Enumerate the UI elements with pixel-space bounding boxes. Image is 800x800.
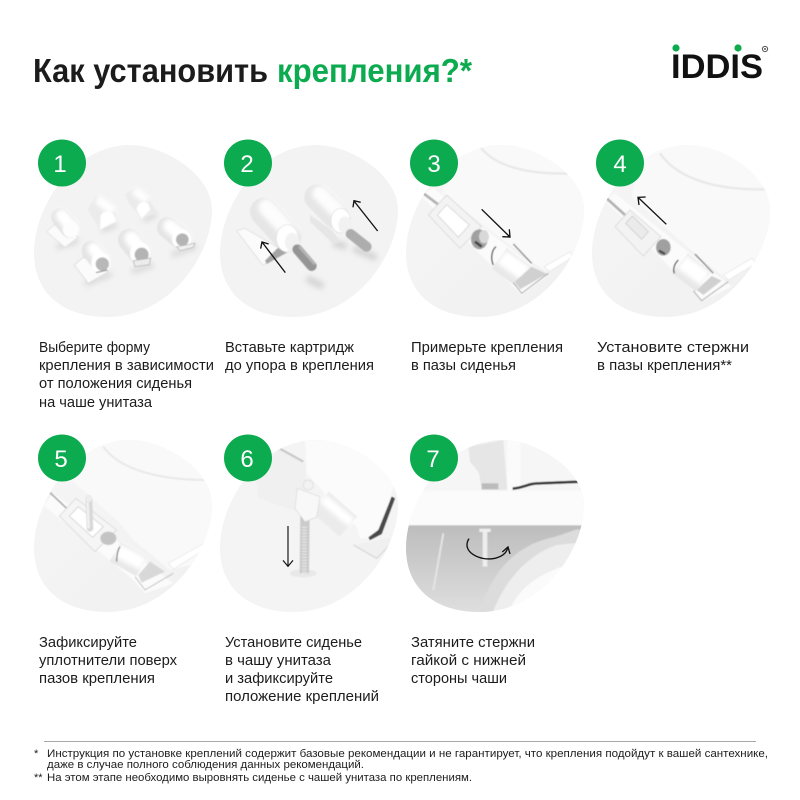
caption 6: и зафиксируйте — [225, 671, 333, 687]
caption 7: стороны чаши — [411, 671, 507, 687]
caption 7: Затяните стержни — [411, 635, 535, 651]
panel: step 2 — [215, 140, 405, 374]
badge 1: 1 — [53, 151, 67, 178]
footnotes: ** — [34, 772, 43, 784]
caption 6: положение креплений — [225, 689, 379, 705]
photo: rods set into bracket slots — [592, 152, 765, 317]
badge 7 — [410, 434, 458, 482]
badge 5 — [38, 434, 86, 482]
arrow — [638, 197, 666, 224]
arrow — [482, 209, 510, 237]
caption 1 — [39, 340, 214, 411]
footnotes: * — [34, 748, 39, 760]
arrows — [261, 201, 378, 273]
footnotes: даже в случае полного соблюдения данных рекомендаций. — [47, 759, 364, 771]
badge 3 — [410, 140, 458, 186]
panel: step 5 — [34, 434, 205, 686]
footnotes: На этом этапе необходимо выровнять сиденье с чашей унитаза по креплениям. — [47, 772, 472, 784]
caption 4 — [597, 340, 749, 374]
photo: six mounting brackets — [34, 145, 212, 317]
footnotes: Инструкция по установке креплений содержит базовые рекомендации и не гарантирует, что крепления подойдут к вашей сантехнике, — [47, 748, 768, 760]
badge 2 — [224, 140, 272, 186]
caption 1: от положения сиденья — [39, 376, 192, 392]
title: Как установить — [33, 52, 268, 89]
badge 2: 2 — [240, 151, 254, 178]
caption 7 — [411, 635, 535, 687]
caption 5: Зафиксируйте — [39, 635, 137, 651]
caption 3: в пазы сиденья — [411, 358, 516, 374]
logo: IDDIS: IDDIS — [671, 48, 763, 86]
panel: step 1 — [30, 140, 220, 411]
title: крепления?* — [277, 52, 472, 89]
panel: step 3 — [406, 140, 573, 373]
caption 3: Примерьте крепления — [411, 340, 563, 356]
caption 3 — [411, 340, 563, 374]
caption 1: крепления в зависимости — [39, 358, 214, 374]
title — [33, 52, 472, 89]
photo: underside of bowl with nut — [406, 440, 582, 612]
badge 4 — [596, 140, 644, 186]
photo: seals fixed over bracket slots — [34, 446, 205, 612]
caption 2: Вставьте картридж — [225, 340, 354, 356]
caption 2: до упора в крепления — [225, 358, 374, 374]
caption 7: гайкой с нижней — [411, 653, 526, 669]
caption 4: в пазы крепления** — [597, 358, 732, 374]
badge 1 — [38, 140, 86, 186]
panel: step 6 — [220, 434, 398, 704]
caption 5: уплотнители поверх — [39, 653, 178, 669]
caption 1: Выберите форму — [39, 340, 151, 356]
panel: step 7 — [406, 434, 582, 686]
caption 6 — [225, 635, 379, 705]
arrow — [283, 526, 293, 566]
caption 5 — [39, 635, 178, 687]
photo: seat placed in bowl — [220, 441, 398, 612]
caption 1: на чаше унитаза — [39, 395, 153, 411]
caption 4: Установите стержни — [597, 340, 749, 356]
badge 4: 4 — [613, 151, 627, 178]
caption 2 — [225, 340, 374, 374]
caption 6: Установите сиденье — [225, 635, 362, 651]
badge 7: 7 — [426, 446, 440, 473]
badge 6 — [224, 434, 272, 482]
arrow — [467, 539, 510, 559]
badge 3: 3 — [427, 151, 441, 178]
footnotes — [34, 748, 768, 784]
photo: cartridges inserted into brackets — [220, 145, 398, 317]
badge 5: 5 — [54, 446, 68, 473]
panel: step 4 — [592, 140, 765, 373]
caption 5: пазов крепления — [39, 671, 155, 687]
badge 6: 6 — [240, 446, 254, 473]
caption 6: в чашу унитаза — [225, 653, 332, 669]
photo: brackets fitted into seat slots — [406, 148, 573, 317]
